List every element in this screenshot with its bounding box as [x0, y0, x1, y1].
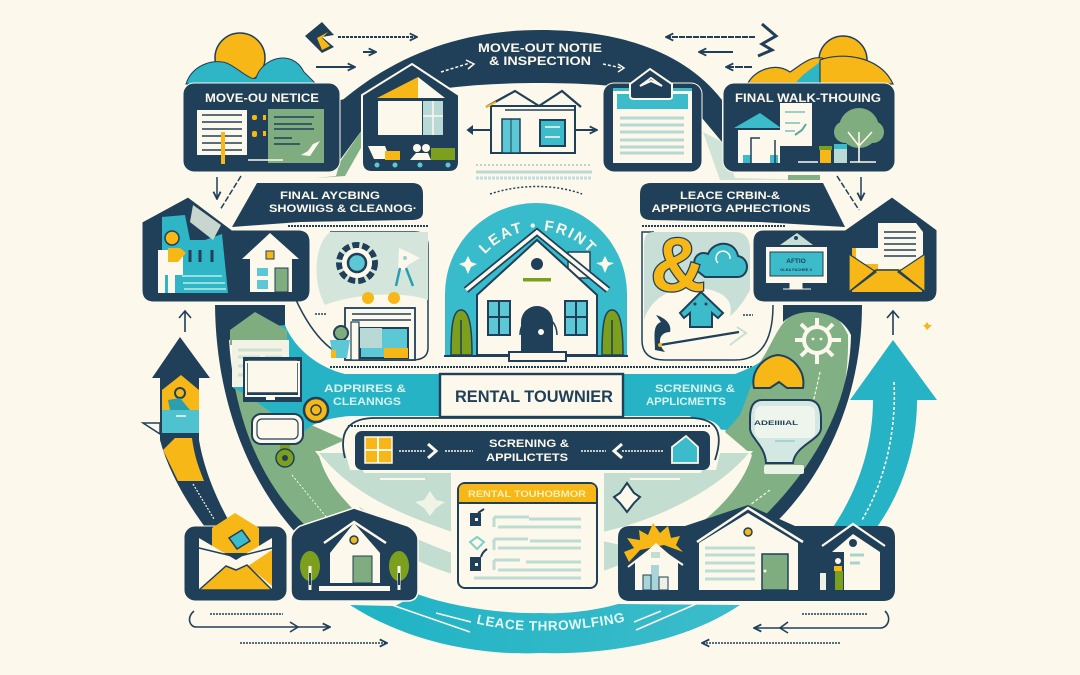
person: [158, 231, 186, 293]
roof: [466, 232, 608, 290]
dashed road: [193, 484, 214, 519]
pale right curve: [603, 452, 751, 572]
diamond sparkle left: [415, 491, 445, 516]
monitor: [243, 357, 302, 402]
small house: [628, 543, 683, 590]
panel: envelope and monitor: [753, 197, 937, 302]
trees: [300, 551, 409, 590]
panel: bottom houses right: [618, 505, 895, 601]
building: [345, 308, 415, 360]
panel: house with moving items: [362, 64, 459, 172]
icon: sun and cloud: [186, 33, 316, 84]
panel: final walk-through: FINAL WALK-THOUING: [735, 93, 881, 105]
left lower items: [230, 312, 328, 467]
left teal text: [324, 383, 406, 408]
teal paper: [162, 205, 228, 293]
figure: [330, 326, 350, 358]
diamond sparkle right: [614, 483, 640, 512]
panel: centre dome: [444, 203, 628, 362]
sign: [750, 400, 821, 474]
icon: yellow dome: [753, 355, 803, 388]
house body: [477, 240, 597, 355]
sun icon: [795, 318, 841, 364]
check items: [470, 509, 487, 571]
dots: [252, 115, 266, 137]
centre title: [440, 374, 623, 417]
oculus: [531, 258, 543, 270]
arrow: left large navy: [143, 337, 232, 527]
icon: hills and sun: [748, 36, 893, 84]
clipboard clasp: [630, 69, 672, 99]
right green field: [698, 308, 848, 525]
top arrows left: [316, 37, 416, 67]
dotted rule right: [642, 225, 785, 227]
yellow road: [163, 438, 204, 481]
right navy ring: [758, 305, 862, 526]
banner: lease creation: [640, 183, 845, 227]
green pentagon: [230, 312, 287, 345]
banner: lease creation: LEACE CRBIN-&: [680, 190, 780, 202]
green path top left: [316, 130, 362, 178]
right teal text: [646, 383, 735, 408]
panel: move-out notice: [183, 33, 340, 172]
note: [248, 109, 324, 163]
icon: teal house: [672, 436, 698, 463]
icon: yellow window: [365, 437, 392, 463]
arrow: right connector: [837, 176, 861, 210]
ground and steps: [444, 352, 628, 361]
list lines: [474, 517, 581, 578]
panel: painter and house: [142, 197, 310, 302]
moving truck and boxes: [368, 144, 455, 168]
garage: [697, 508, 803, 590]
arrow: left connector: [217, 176, 241, 210]
banner: lease creation: APPPIIOTG APHECTIONS: [652, 203, 810, 215]
panel: inner lease: [642, 223, 773, 362]
arrow: right large teal: [833, 340, 937, 527]
chimney: [568, 252, 590, 278]
panel: checklist: RENTAL TOUHOBMOR: [468, 489, 587, 499]
dashed route right: [750, 372, 820, 505]
sparkle: [923, 322, 932, 330]
top arc band: [338, 30, 722, 142]
document: [232, 340, 289, 387]
windows: [488, 301, 587, 335]
door: [520, 306, 557, 355]
left green field: [228, 370, 352, 532]
icon: left diamond chevron: [305, 22, 334, 53]
pale left curve: [317, 452, 452, 575]
right teal text: SCRENING &: [655, 383, 735, 395]
banner: final showings: SHOWIIGS & CLEANOG·: [269, 203, 417, 215]
arrows: bottom right: [703, 611, 889, 643]
dotted rule: [330, 366, 766, 368]
top arc title: MOVE-OUT NOTIE: [478, 41, 602, 55]
panel: envelope bottom: [184, 513, 287, 601]
small dashes: [743, 314, 753, 316]
panel: bottom house: [291, 508, 418, 601]
pale highlights: [380, 478, 680, 480]
left teal text: ADPRIRES &: [324, 383, 406, 395]
ampersand: &: [651, 223, 705, 308]
arrows: bottom left: [190, 611, 386, 643]
cloud: [694, 244, 747, 277]
roller coin: [304, 398, 328, 422]
top arrows right: [667, 37, 755, 67]
roller: [252, 414, 303, 467]
house: [324, 522, 386, 583]
panel: final walk-through: [723, 36, 895, 172]
bottom teal arc: [350, 594, 740, 653]
arrows: [399, 444, 663, 458]
monitor: AFTIO: [786, 258, 806, 265]
dotted arc above dome: [490, 186, 582, 194]
base: [319, 586, 390, 591]
yellow dots: [362, 292, 400, 304]
panel: screening band: [342, 418, 723, 470]
bins: [798, 144, 847, 163]
gear: [339, 245, 375, 281]
clipboard lines: [620, 118, 684, 153]
bushes: [451, 310, 623, 355]
side flag: [143, 423, 160, 434]
panel: screening band: APPILICTETS: [486, 452, 568, 464]
top arc title: & INSPECTION: [489, 54, 591, 68]
arc dashed arrows: [441, 60, 624, 72]
house: [242, 233, 299, 292]
left teal text: CLEANNGS: [333, 396, 401, 408]
pickaxe: [655, 315, 746, 352]
small dashes: [315, 313, 327, 315]
monitor: GLEA FACHEE 3: [780, 267, 813, 272]
sparkles: [459, 256, 614, 274]
top arc title: [478, 41, 602, 68]
tool: [396, 248, 420, 286]
arrow: right small up: [887, 311, 899, 335]
dotted rules under houses: [476, 165, 592, 178]
panel: checklist: [458, 483, 597, 588]
panel: inner maintenance: [296, 232, 428, 360]
arc highlights: [392, 604, 696, 632]
arc text: LEACE THROWLFING: [477, 613, 624, 630]
yellow tag: [212, 513, 259, 553]
monitor: [766, 233, 827, 289]
panel: screening band: SCRENING &: [489, 438, 569, 450]
yellow tag: [162, 375, 199, 410]
dome text: LEAT • FRINT: [478, 220, 597, 254]
icon: zigzag: [758, 24, 776, 56]
green accent top right: [788, 175, 820, 180]
right teal band: [623, 362, 760, 430]
pale path top right: [703, 132, 820, 180]
left navy ring: [215, 305, 308, 533]
envelope: [849, 223, 925, 292]
arrow: left small up: [179, 311, 191, 332]
banner: final showings: FINAL AYCBING: [280, 190, 380, 202]
teal gem: [229, 530, 250, 549]
panel: clipboard: [603, 69, 702, 172]
centre title: RENTAL TOUWNIER: [455, 387, 613, 406]
envelope: [199, 538, 272, 590]
tree: [834, 108, 884, 162]
third house: [820, 524, 885, 590]
sign: ADEIIIIAL: [754, 420, 798, 427]
sunburst: [624, 523, 683, 562]
left teal band: [233, 325, 440, 434]
icon: centre top houses: [468, 91, 596, 153]
right teal text: APPLICMETTS: [646, 396, 726, 408]
paper: [780, 103, 812, 146]
panel: move-out notice: MOVE-OU NETICE: [205, 93, 319, 105]
green dash: [292, 475, 327, 518]
house: [734, 113, 781, 163]
dotted rule left: [288, 225, 428, 227]
navy link between panels: [340, 95, 365, 160]
shirt house: [680, 292, 723, 327]
document: [197, 110, 247, 164]
banner: final showings: [232, 183, 423, 227]
teal strip: [162, 398, 199, 433]
